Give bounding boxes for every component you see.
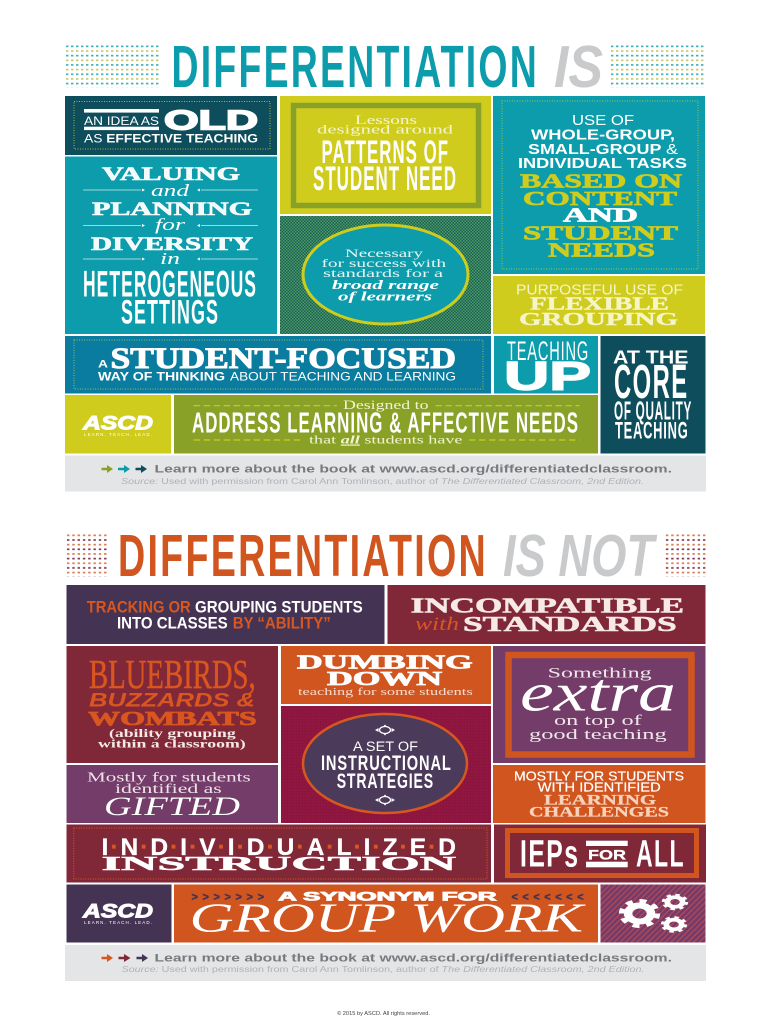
panel: a synonym for group work: A SYNONYM FOR — [278, 892, 498, 904]
panel: a synonym for group work — [174, 884, 598, 942]
panel: mostly for gifted — [66, 765, 278, 823]
panel: mostly for students with learning challenges: MOSTLY FOR STUDENTS — [514, 770, 684, 784]
panel: dumbing down: DUMBING — [297, 651, 473, 673]
panel: tracking or grouping: TRACKING OR — [87, 599, 191, 617]
panel: necessary for success: broad range — [332, 277, 439, 292]
panel: address learning and affective needs: that all students have — [309, 432, 462, 446]
panel: purposeful use of flexible grouping: FLEXIBLE — [530, 294, 669, 314]
panel: use of whole-group: WHOLE-GROUP, — [531, 128, 675, 144]
footer bar: learn more top — [65, 456, 706, 492]
panel: individualized instruction — [66, 824, 491, 882]
panel: purposeful use of flexible grouping: GROUPING — [519, 309, 678, 329]
icon: small gear bottom — [663, 918, 685, 932]
icon: target top — [375, 724, 395, 736]
panel: ascd logo purple: ASCD — [82, 900, 153, 922]
panel: bluebirds buzzards wombats: BUZZARDS & — [89, 690, 255, 712]
panel: teaching up: UP — [504, 354, 591, 398]
panel: tracking or grouping: BY “ABILITY” — [233, 614, 331, 632]
panel: a student-focused way of thinking: WAY OF THINKING — [98, 371, 225, 384]
panel: an idea as old: OLD — [164, 104, 258, 136]
panel: bluebirds buzzards wombats: WOMBATS — [88, 708, 257, 730]
panel: incompatible with standards — [388, 585, 706, 644]
panel: patterns of student need: PATTERNS OF — [322, 134, 449, 170]
panel: at the core: CORE — [614, 356, 688, 409]
panel: a synonym for group work: >>>>>>> — [192, 892, 264, 904]
icon: large gear — [622, 901, 657, 926]
panel: necessary for success: standards for a — [323, 266, 444, 280]
panel: bluebirds buzzards wombats — [66, 646, 278, 763]
panel: bluebirds buzzards wombats: (ability grouping — [109, 728, 236, 740]
panel: bluebirds buzzards wombats: BLUEBIRDS, — [89, 651, 256, 697]
panel: purposeful use of flexible grouping — [493, 276, 705, 334]
panel: ieps for all — [494, 824, 706, 882]
panel: patterns of student need: Lessons — [355, 113, 417, 127]
panel: valuing and planning: and — [151, 181, 190, 200]
panel: valuing and planning: in — [160, 249, 180, 268]
panel: a student-focused way of thinking — [65, 336, 491, 394]
panel: ascd logo yellow: ASCD — [82, 412, 153, 434]
panel: mostly for gifted: identified as — [115, 782, 222, 797]
panel: teaching up — [494, 336, 598, 398]
panel: use of whole-group: NEEDS — [548, 240, 655, 262]
halftone dots left bottom — [66, 534, 108, 576]
footer bar: learn more top: Source: Used with permission from Carol Ann Tomlinson, author of The Differentiated Classroom, 2nd Edition. — [121, 477, 644, 486]
panel: patterns of student need: designed around — [317, 122, 454, 136]
panel: tracking or grouping — [66, 585, 384, 644]
icon: target bottom — [375, 794, 395, 806]
panel: a set of instructional strategies — [281, 706, 491, 823]
panel: mostly for students with learning challenges — [493, 765, 706, 823]
panel: mostly for gifted: GIFTED — [104, 792, 240, 821]
panel: a set of instructional strategies: INSTRUCTIONAL — [321, 751, 452, 775]
panel: mostly for gifted: Mostly for students — [87, 771, 251, 786]
panel: use of whole-group: CONTENT — [523, 188, 677, 210]
panel: dumbing down: DOWN — [327, 668, 442, 690]
panel: necessary for success: Necessary — [345, 246, 423, 260]
copyright: © 2015 by ASCD. All rights reserved. — [337, 1010, 430, 1017]
panel: valuing and planning — [65, 156, 277, 334]
panel: ieps for all: FOR — [588, 848, 626, 862]
panel: a student-focused way of thinking: STUDENT-FOCUSED — [110, 343, 456, 375]
panel: something extra: on top of — [554, 713, 642, 729]
panel: ieps for all: IEPs — [520, 834, 580, 876]
panel: valuing and planning: for — [155, 215, 186, 234]
panel: patterns of student need — [280, 96, 491, 214]
title: differentiation is not: IS NOT — [503, 522, 658, 589]
panel: valuing and planning: SETTINGS — [121, 294, 219, 332]
section: differentiation is — [65, 33, 706, 492]
panel: an idea as old — [65, 96, 277, 155]
panel: ascd logo purple — [66, 884, 172, 942]
title: differentiation is: IS — [554, 33, 603, 100]
panel: a student-focused way of thinking: ABOUT TEACHING AND LEARNING — [230, 371, 456, 384]
panel: at the core: TEACHING — [615, 418, 688, 444]
panel: something extra: Something — [548, 666, 652, 682]
panel: something extra: good teaching — [529, 727, 668, 743]
panel: necessary for success: of learners — [338, 288, 432, 304]
panel: a set of instructional strategies: STRATEGIES — [337, 769, 434, 793]
panel: ascd logo yellow — [65, 395, 171, 454]
panel: a set of instructional strategies: A SET OF — [353, 739, 418, 754]
panel: bluebirds buzzards wombats: within a classroom) — [98, 739, 246, 751]
panel: use of whole-group: STUDENT — [523, 222, 679, 244]
panel: incompatible with standards: STANDARDS — [463, 612, 677, 636]
panel: valuing and planning: DIVERSITY — [91, 235, 254, 255]
footer bar: learn more bottom — [65, 945, 706, 981]
panel: necessary for success: for success with — [322, 256, 446, 270]
panel: at the core — [600, 336, 706, 454]
panel: necessary for success — [280, 216, 491, 334]
panel: patterns of student need: STUDENT NEED — [313, 160, 457, 198]
halftone dots right bottom — [663, 534, 706, 576]
panel: ascd logo yellow: LEARN. TEACH. LEAD. — [84, 432, 152, 437]
panel: valuing and planning: VALUING — [102, 165, 240, 185]
panel: use of whole-group — [493, 96, 705, 274]
panel: gears icon — [600, 884, 706, 942]
icon: small gear top — [664, 895, 686, 909]
panel: a student-focused way of thinking: A — [98, 359, 108, 371]
panel: at the core: AT THE — [613, 346, 688, 368]
panel: individualized instruction: I·N·D·I·V·I·D·U·A·L·I·Z·E·D — [102, 834, 456, 861]
panel: address learning and affective needs: Designed to — [343, 398, 428, 412]
panel: a synonym for group work: GROUP WORK — [190, 895, 587, 941]
panel: a synonym for group work: <<<<<<< — [512, 892, 584, 904]
panel: incompatible with standards: with — [415, 614, 459, 635]
panel: something extra: extra — [520, 663, 676, 723]
panel: an idea as old: AS EFFECTIVE TEACHING — [84, 132, 258, 146]
panel: ieps for all: ALL — [636, 834, 685, 876]
panel: mostly for students with learning challenges: CHALLENGES — [529, 805, 669, 821]
title: differentiation is not: DIFFERENTIATION — [118, 522, 488, 589]
panel: something extra — [493, 646, 706, 763]
panel: dumbing down — [281, 646, 491, 704]
panel: mostly for students with learning challenges: LEARNING — [544, 792, 656, 808]
footer bar: learn more top: Learn more about the book at www.ascd.org/differentiatedclassroom. — [154, 464, 672, 476]
panel: valuing and planning: HETEROGENEOUS — [83, 262, 257, 304]
panel: teaching up: TEACHING — [507, 336, 589, 366]
panel: tracking or grouping: GROUPING STUDENTS — [195, 599, 363, 617]
panel: use of whole-group: USE OF — [572, 113, 634, 129]
panel: incompatible with standards: INCOMPATIBLE — [411, 593, 684, 617]
panel: an idea as old: AN IDEA AS — [84, 115, 159, 128]
panel: use of whole-group: SMALL-GROUP & — [528, 142, 678, 158]
panel: use of whole-group: INDIVIDUAL TASKS — [518, 156, 687, 172]
panel: individualized instruction: INSTRUCTION — [102, 854, 456, 875]
panel: use of whole-group: AND — [563, 205, 638, 227]
panel: dumbing down: teaching for some students — [298, 686, 473, 698]
section: differentiation is not — [65, 522, 706, 981]
panel: tracking or grouping: INTO CLASSES — [117, 614, 228, 632]
panel: use of whole-group: BASED ON — [520, 170, 682, 192]
panel: mostly for students with learning challenges: WITH IDENTIFIED — [538, 781, 661, 795]
footer bar: learn more bottom: Learn more about the book at www.ascd.org/differentiatedclassroom. — [154, 953, 672, 965]
panel: purposeful use of flexible grouping: PURPOSEFUL USE OF — [516, 282, 683, 298]
halftone dots right — [610, 46, 705, 88]
panel: ascd logo purple: LEARN. TEACH. LEAD. — [84, 920, 152, 925]
panel: valuing and planning: PLANNING — [92, 200, 252, 220]
title: differentiation is: DIFFERENTIATION — [172, 33, 539, 100]
footer bar: learn more bottom: Source: Used with permission from Carol Ann Tomlinson, author of The Differentiated Classroom, 2nd Edition. — [122, 965, 644, 974]
halftone dots left — [65, 46, 159, 88]
panel: address learning and affective needs — [174, 395, 598, 454]
